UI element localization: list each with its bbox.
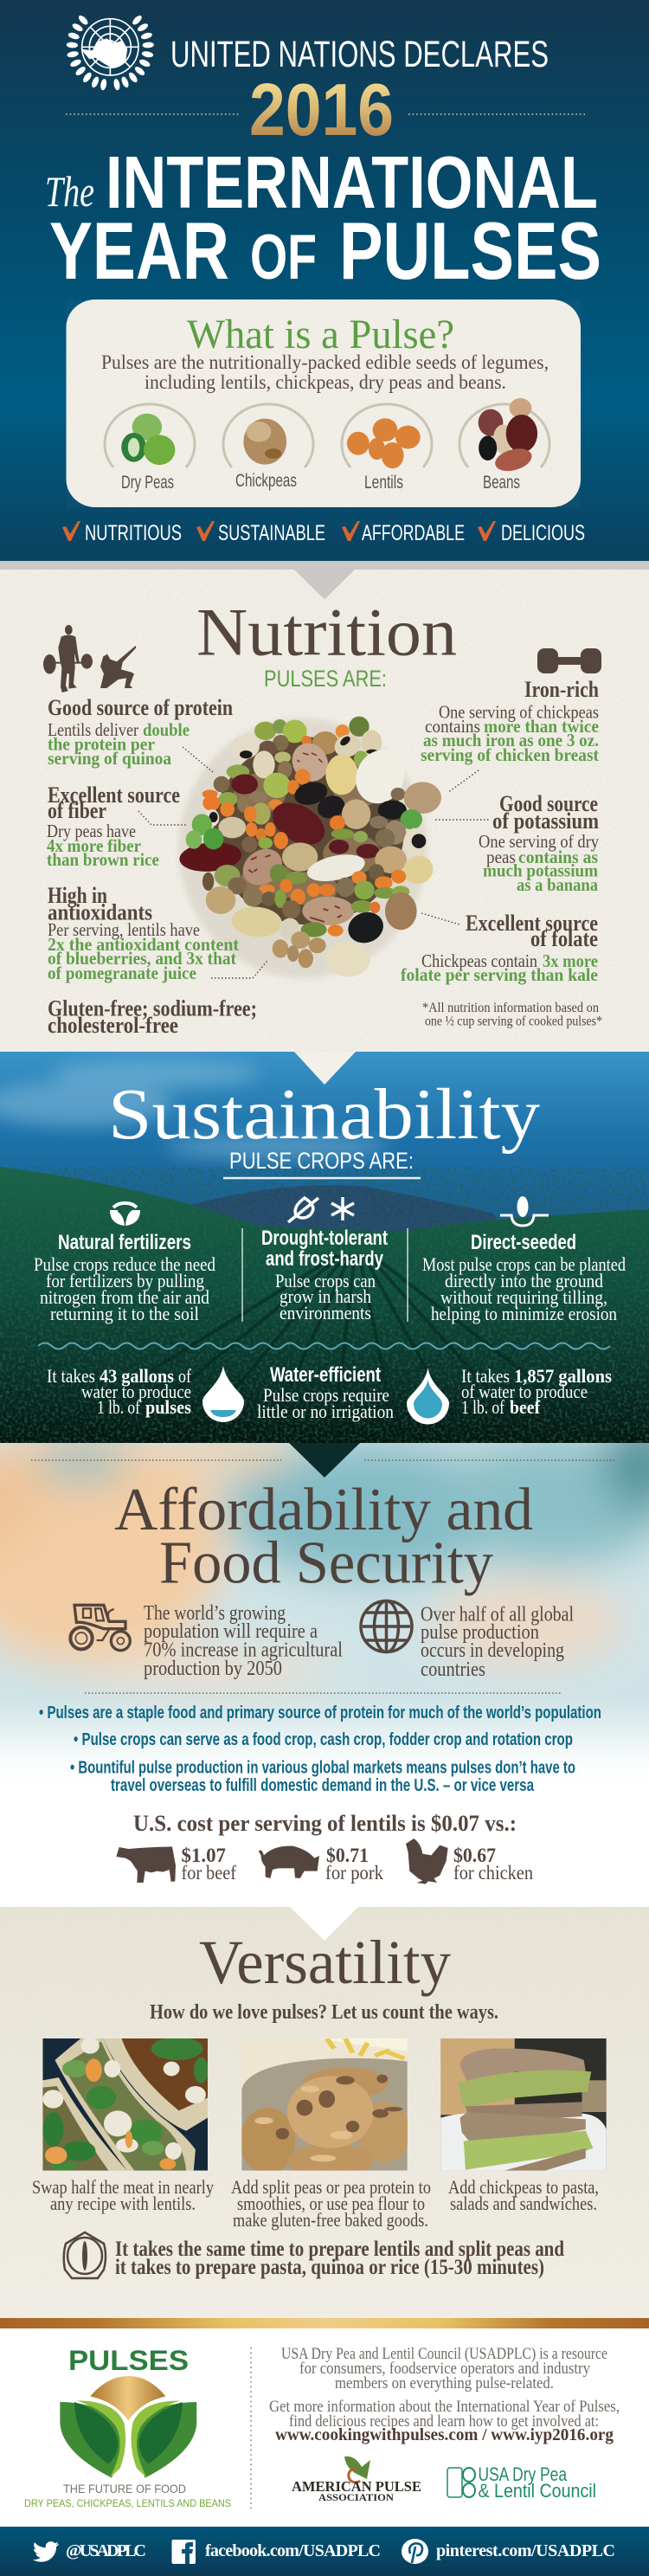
stat: beef water use: beef bbox=[510, 1396, 541, 1418]
logo: pulses the future of food: THE FUTURE OF FOOD bbox=[63, 2482, 186, 2496]
icon: United Nations emblem bbox=[67, 14, 154, 91]
callout: fiber: Dry peas have bbox=[47, 821, 136, 841]
icon: kitchen timer bbox=[64, 2232, 106, 2278]
text: developing countries: pulse production bbox=[421, 1621, 539, 1644]
footnote: nutrition bbox=[422, 1001, 602, 1028]
callout: folate: folate per serving than kale bbox=[401, 964, 598, 985]
footnote: nutrition: *All nutrition information based on bbox=[422, 1001, 599, 1015]
callout: potassium: One serving of dry bbox=[479, 831, 599, 852]
callout: antioxidants: antioxidants bbox=[48, 900, 152, 924]
title: The International Year of Pulses: The bbox=[45, 167, 94, 216]
stat: beef water use bbox=[462, 1369, 611, 1414]
leader lines bbox=[138, 747, 489, 978]
text: developing countries: countries bbox=[421, 1658, 485, 1681]
photo: cookies bbox=[240, 2038, 411, 2179]
price: beef bbox=[182, 1847, 236, 1879]
heading: 2016: 2016 bbox=[249, 69, 394, 151]
labels: pulse types: Chickpeas bbox=[235, 471, 297, 491]
text: population growth bbox=[144, 1602, 343, 1680]
benefit: direct-seeded: without requiring tilling, bbox=[440, 1286, 607, 1308]
callout: fiber bbox=[47, 782, 180, 870]
heading: affordability and food security: Affordability and bbox=[114, 1477, 533, 1543]
callout: folate: Chickpeas contain bbox=[421, 950, 537, 971]
callout: potassium: peas bbox=[486, 847, 516, 867]
text: developing countries: occurs in developing bbox=[421, 1639, 564, 1662]
panel: versatility bbox=[0, 1907, 649, 2318]
icon: dry peas bbox=[121, 414, 175, 465]
icon: water drop nearly full bbox=[407, 1368, 449, 1424]
callout: iron: as much iron as one 3 oz. bbox=[423, 730, 599, 750]
icon: weightlifter and yoga figures bbox=[43, 625, 136, 692]
checklist: attributes: DELICIOUS bbox=[501, 521, 585, 545]
callout: preparation time: It takes the same time to prepare lentils and split peas and bbox=[115, 2238, 564, 2261]
stat: water-efficient bbox=[257, 1363, 394, 1422]
handle: pinterest: pinterest.com/USADPLC bbox=[436, 2541, 615, 2560]
social media bar bbox=[0, 2527, 649, 2576]
heading: versatility: Versatility bbox=[199, 1928, 451, 1997]
handle: twitter: @USADPLC bbox=[66, 2541, 146, 2560]
price: pork: for pork bbox=[325, 1862, 383, 1884]
logo: pulses the future of food: PULSES bbox=[68, 2345, 189, 2376]
icon: chicken bbox=[406, 1839, 448, 1884]
callout: iron: Iron-rich bbox=[524, 677, 599, 702]
caption: chickpeas: Add chickpeas to pasta, bbox=[448, 2176, 599, 2198]
price: chicken: for chicken bbox=[453, 1862, 533, 1884]
labels: pulse types bbox=[121, 471, 520, 493]
price: chicken: $0.67 bbox=[453, 1845, 496, 1866]
text: more information bbox=[269, 2398, 620, 2444]
checklist: attributes bbox=[62, 521, 585, 545]
callout: fiber: of fiber bbox=[48, 798, 106, 823]
benefit: natural fertilizers: returning it to the soil bbox=[50, 1303, 199, 1324]
callout: protein: the protein per bbox=[48, 734, 155, 755]
stat: beef water use: 1,857 gallons bbox=[514, 1365, 612, 1387]
title: The International Year of Pulses: YEAR bbox=[49, 205, 229, 296]
icon: lentils bbox=[347, 418, 421, 468]
logo: usa dry pea and lentil council: & Lentil Council bbox=[478, 2480, 596, 2502]
callout: potassium: contains as bbox=[518, 847, 598, 867]
callout: gluten-free: cholesterol-free bbox=[48, 1013, 178, 1038]
callout: iron: contains bbox=[425, 716, 480, 737]
icon: pulse types bbox=[105, 404, 549, 467]
panel: sustainability bbox=[0, 1052, 649, 1443]
benefit: drought-tolerant bbox=[261, 1227, 388, 1323]
logo: usa dry pea and lentil council bbox=[447, 2463, 596, 2502]
text: pulse definition bbox=[101, 351, 549, 393]
checklist: attributes: AFFORDABLE bbox=[362, 521, 465, 545]
subheading: pulses are: PULSES ARE: bbox=[264, 666, 387, 692]
icon: twitter bbox=[33, 2541, 59, 2562]
icon: seed in soil bbox=[500, 1196, 549, 1226]
benefit: drought-tolerant: Drought-tolerant bbox=[261, 1227, 388, 1250]
benefit: direct-seeded: helping to minimize erosion bbox=[431, 1303, 617, 1324]
clouds bbox=[0, 1059, 389, 1159]
logo: american pulse association: ASSOCIATION bbox=[318, 2491, 394, 2503]
text: population growth: production by 2050 bbox=[144, 1658, 282, 1680]
stat: pulses water use: pulses bbox=[145, 1396, 191, 1418]
callout: preparation time bbox=[115, 2238, 564, 2279]
caption: split peas bbox=[231, 2176, 431, 2231]
callout: iron bbox=[421, 677, 600, 765]
caption: split peas: smoothies, or use pea flour to bbox=[237, 2193, 425, 2214]
title: The International Year of Pulses: OF bbox=[250, 222, 317, 293]
callout: protein: double bbox=[143, 719, 190, 740]
checklist: attributes: SUSTAINABLE bbox=[218, 521, 325, 545]
callout: fiber: than brown rice bbox=[47, 849, 159, 870]
text: more information: find delicious recipes and learn how to get involved at: bbox=[289, 2412, 599, 2431]
icon: facebook bbox=[171, 2540, 196, 2564]
logo: pulses the future of food: DRY PEAS, CHICKPEAS, LENTILS AND BEANS bbox=[24, 2497, 231, 2509]
stat: water-efficient: Pulse crops require bbox=[263, 1384, 389, 1406]
callout: iron: One serving of chickpeas bbox=[439, 701, 599, 722]
callout: potassium: Good source bbox=[499, 791, 598, 816]
heading: what is a pulse: What is a Pulse? bbox=[187, 312, 454, 357]
icon: leaf with recycling arrows bbox=[110, 1203, 140, 1226]
callout: protein: Good source of protein bbox=[48, 695, 233, 720]
labels: pulse types: Beans bbox=[483, 473, 520, 493]
callout: fiber: 4x more fiber bbox=[47, 835, 141, 856]
caption: swap meat: any recipe with lentils. bbox=[50, 2193, 196, 2214]
panel: affordability and food security bbox=[0, 1443, 649, 1884]
heading: lentil cost comparison: U.S. cost per serving of lentils is $0.07 vs.: bbox=[133, 1811, 517, 1836]
crop rows bbox=[35, 1255, 614, 1443]
heading: affordability and food security: Food Security bbox=[159, 1530, 493, 1597]
price: beef: for beef bbox=[182, 1862, 236, 1884]
stat: pulses water use bbox=[47, 1365, 192, 1418]
caption: split peas: make gluten-free baked goods. bbox=[233, 2209, 428, 2231]
stat: pulses water use: of bbox=[178, 1365, 192, 1387]
benefit: natural fertilizers: Pulse crops reduce the need bbox=[34, 1253, 215, 1275]
icon: beans bbox=[479, 398, 537, 475]
stat: pulses water use: It takes bbox=[47, 1365, 95, 1387]
callout: protein bbox=[48, 695, 233, 769]
text: developing countries: Over half of all global bbox=[421, 1603, 574, 1626]
callout: folate: 3x more bbox=[543, 950, 598, 971]
stat: pulses water use: water to produce bbox=[81, 1381, 191, 1402]
stat: pulses water use: 43 gallons bbox=[100, 1365, 174, 1387]
checklist: attributes: NUTRITIOUS bbox=[85, 521, 182, 545]
benefit: drought-tolerant: environments bbox=[280, 1302, 371, 1323]
callout: iron: serving of chicken breast bbox=[421, 744, 600, 765]
icon: water drop nearly empty bbox=[202, 1366, 244, 1422]
benefit: drought-tolerant: Pulse crops can bbox=[275, 1270, 376, 1291]
callout: folate bbox=[401, 911, 598, 985]
callout: iron: more than twice bbox=[484, 716, 599, 737]
subheading: how do we love pulses: How do we love pulses? Let us count the ways. bbox=[150, 2001, 498, 2024]
logo: pulses the future of food bbox=[24, 2345, 231, 2509]
callout: folate: of folate bbox=[530, 926, 598, 951]
text: about usadplc: members on everything pulse-related. bbox=[335, 2374, 554, 2392]
heading: nutrition: Nutrition bbox=[196, 594, 457, 670]
caption: swap meat: Swap half the meat in nearly bbox=[32, 2176, 214, 2198]
pile of pulses bbox=[178, 717, 441, 978]
callout: antioxidants: 2x the antioxidant content bbox=[48, 934, 240, 955]
callout: antioxidants: High in bbox=[48, 883, 107, 908]
callout: fiber: Excellent source bbox=[48, 782, 180, 808]
icon: pig bbox=[259, 1846, 319, 1878]
icon: pinterest bbox=[402, 2539, 428, 2564]
callout: protein: Lentils deliver bbox=[48, 719, 138, 740]
text: pulse definition: including lentils, chickpeas, dry peas and beans. bbox=[145, 371, 506, 393]
caption: split peas: Add split peas or pea protein to bbox=[231, 2176, 431, 2198]
bullet list: food security facts bbox=[39, 1703, 601, 1795]
callout: potassium: as a banana bbox=[517, 874, 598, 895]
text: pulse definition: Pulses are the nutritionally-packed edible seeds of legumes, bbox=[101, 351, 549, 373]
stat: beef water use: 1 lb. of bbox=[461, 1396, 505, 1418]
caption: chickpeas bbox=[448, 2176, 599, 2214]
panel: footer bbox=[0, 2318, 649, 2576]
stat: beef water use: It takes bbox=[461, 1365, 510, 1387]
handle: facebook: facebook.com/USADPLC bbox=[205, 2541, 381, 2560]
icon: cow bbox=[116, 1846, 176, 1883]
text: about usadplc bbox=[281, 2345, 607, 2392]
benefit: natural fertilizers: Natural fertilizers bbox=[58, 1231, 191, 1254]
caption: chickpeas: salads and sandwiches. bbox=[450, 2193, 597, 2214]
benefit: drought-tolerant: and frost-hardy bbox=[266, 1247, 384, 1271]
title: The International Year of Pulses bbox=[45, 142, 601, 296]
logo: usa dry pea and lentil council: USA Dry Pea bbox=[478, 2463, 568, 2485]
labels: pulse types: Lentils bbox=[364, 473, 403, 493]
benefit: direct-seeded bbox=[422, 1231, 626, 1324]
icon: dumbbell bbox=[537, 648, 601, 673]
text: more information: www.cookingwithpulses.com / www.iyp2016.org bbox=[275, 2425, 614, 2444]
callout: folate: Excellent source bbox=[466, 911, 598, 936]
caption: swap meat bbox=[32, 2176, 214, 2214]
heading: sustainability: Sustainability bbox=[108, 1074, 540, 1155]
text: population growth: 70% increase in agricultural bbox=[144, 1639, 343, 1662]
benefit: natural fertilizers: for fertilizers by pulling bbox=[46, 1270, 204, 1291]
icon: drought and snowflake bbox=[288, 1197, 354, 1222]
price: chicken bbox=[453, 1847, 533, 1879]
photo: lentil tacos bbox=[42, 2037, 209, 2171]
callout: antioxidants bbox=[48, 883, 240, 983]
benefit: drought-tolerant: grow in harsh bbox=[280, 1285, 371, 1307]
text: population growth: population will require a bbox=[144, 1620, 318, 1643]
photo: chickpea sandwich bbox=[440, 2038, 607, 2171]
stat: water-efficient: Water-efficient bbox=[270, 1363, 381, 1387]
footnote: nutrition: one ½ cup serving of cooked pulses* bbox=[425, 1014, 602, 1028]
icon: globe bbox=[361, 1601, 412, 1652]
logo: american pulse association bbox=[292, 2457, 421, 2503]
callout: protein: serving of quinoa bbox=[48, 748, 171, 769]
callout: gluten-free bbox=[48, 995, 257, 1038]
heading: affordability and food security bbox=[114, 1477, 533, 1597]
callout: antioxidants: of blueberries, and 3x that bbox=[48, 948, 237, 969]
price: beef: $1.07 bbox=[182, 1845, 226, 1866]
callout: potassium bbox=[479, 791, 599, 895]
icon: tractor bbox=[70, 1605, 130, 1651]
blurred globe map background bbox=[0, 1443, 649, 1757]
header panel bbox=[0, 0, 649, 561]
stat: pulses water use: 1 lb. of bbox=[97, 1396, 141, 1418]
text: developing countries bbox=[421, 1603, 574, 1681]
panel: nutrition bbox=[0, 561, 649, 1052]
price: pork bbox=[325, 1845, 383, 1884]
callout: antioxidants: Per serving, lentils have bbox=[48, 919, 200, 940]
icon: chickpeas bbox=[243, 419, 286, 465]
callout: potassium: much potassium bbox=[483, 860, 598, 881]
stat: water-efficient: little or no irrigation bbox=[257, 1401, 394, 1422]
logo: american pulse association: AMERICAN PULSE bbox=[292, 2478, 421, 2495]
labels: pulse types: Dry Peas bbox=[121, 473, 174, 493]
stat: beef water use: of water to produce bbox=[461, 1381, 588, 1402]
text: about usadplc: for consumers, foodservice operators and industry bbox=[299, 2360, 590, 2378]
benefit: natural fertilizers bbox=[34, 1231, 215, 1324]
benefit: natural fertilizers: nitrogen from the air and bbox=[40, 1286, 209, 1308]
text: population growth: The world’s growing bbox=[144, 1602, 286, 1625]
benefit: direct-seeded: directly into the ground bbox=[445, 1270, 603, 1291]
callout: antioxidants: of pomegranate juice bbox=[48, 963, 196, 983]
subheading: pulse crops are: PULSE CROPS ARE: bbox=[229, 1148, 414, 1174]
benefit: direct-seeded: Direct-seeded bbox=[471, 1231, 576, 1254]
callout: potassium: of potassium bbox=[492, 808, 599, 834]
callout: preparation time: it takes to prepare pasta, quinoa or rice (15-30 minutes) bbox=[115, 2256, 544, 2279]
panel: what is a pulse bbox=[66, 299, 581, 507]
callout: gluten-free: Gluten-free; sodium-free; bbox=[48, 995, 257, 1021]
price: pork: $0.71 bbox=[326, 1845, 369, 1866]
